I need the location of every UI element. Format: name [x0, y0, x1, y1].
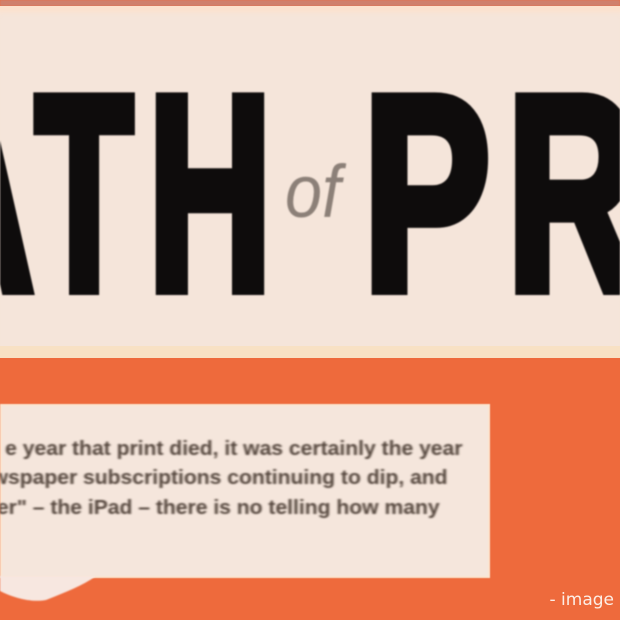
- title: Death of Print: P: [363, 40, 490, 348]
- top edge strip: [0, 0, 620, 6]
- intro text line 1: e year that print died, it was certainly the year: [5, 438, 462, 460]
- title: Death of Print: H: [148, 38, 272, 348]
- title banner background: [0, 6, 620, 358]
- title: Death of Print: [0, 38, 620, 348]
- title: Death of Print: of: [285, 150, 347, 233]
- title: Death of Print: T: [35, 38, 133, 348]
- intro text line 3: er" – the iPad – there is no telling how many: [0, 497, 440, 519]
- image caption: - image: [550, 590, 614, 610]
- panel bottom tab: [0, 576, 95, 602]
- intro text panel: [0, 404, 490, 578]
